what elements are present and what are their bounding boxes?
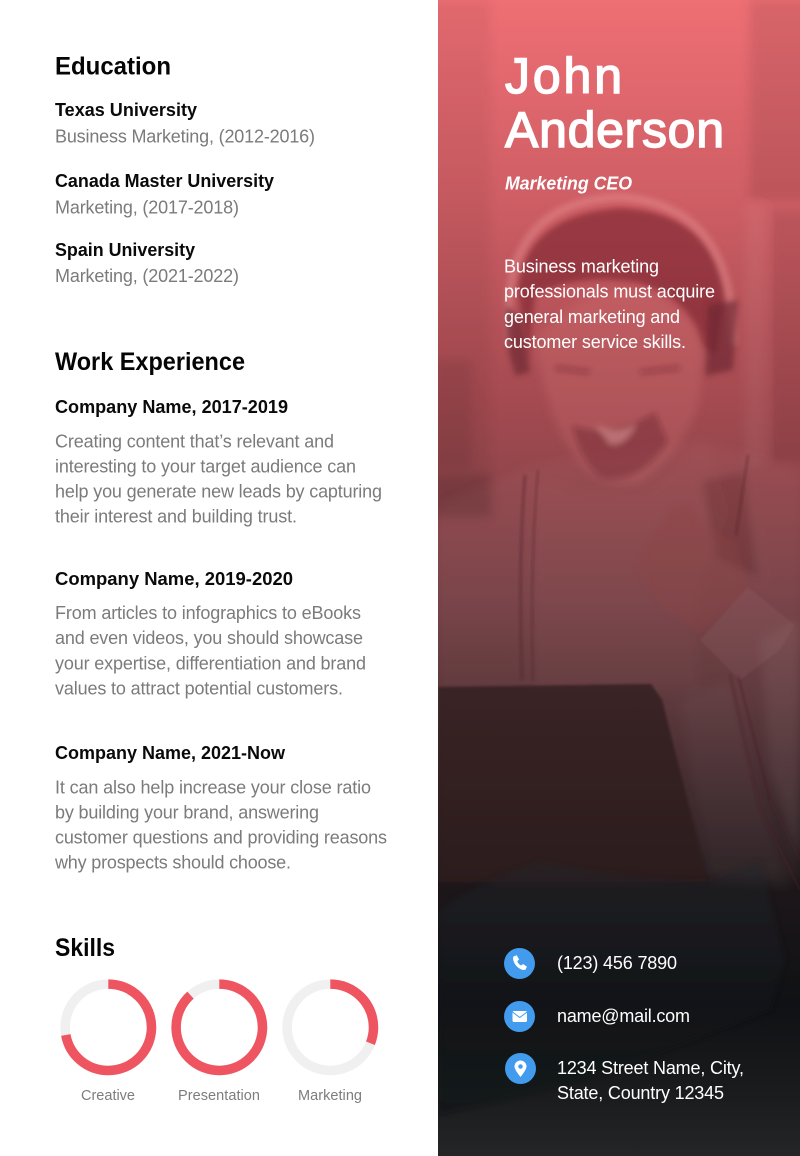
left white panel [0,0,438,1156]
job 2: your expertise, differentiation and brand [55,654,366,674]
jacket and torso [530,476,800,882]
contact: email: name@mail.com [557,1006,690,1026]
summary text: customer service skills. [504,332,686,352]
job 1: interesting to your target audience can [55,456,356,476]
entry: Texas University [55,100,315,146]
contact: address: 1234 Street Name, City, [557,1058,744,1078]
donut: presentation 88% [176,984,262,1070]
job title: Marketing CEO [505,174,632,194]
job 1: Company Name, 2017-2019 [55,397,288,417]
contact: address [505,1053,744,1103]
entry: Canada Master University: Canada Master University [55,171,274,191]
contact: phone: (123) 456 7890 [557,953,677,973]
panel: photo with red gradient overlay [432,0,800,1156]
summary text: general marketing and [504,307,680,327]
donut: creative 72% [65,984,152,1070]
icon: envelope [504,1001,535,1032]
job 1 [55,397,382,526]
job 3: Company Name, 2021-Now [55,743,286,763]
entry: Spain University: Marketing, (2021-2022) [55,266,239,286]
name: Anderson [505,102,724,158]
job 1: their interest and building trust. [55,506,297,526]
icon: phone [504,948,535,979]
background window stripes [432,0,800,520]
summary text: Business marketing [504,256,659,276]
name [505,48,724,158]
icon: map pin [505,1053,536,1084]
job 3 [54,743,387,872]
name: John [505,48,622,104]
job 2 [55,569,366,698]
skill labels: Presentation [178,1088,260,1104]
job 2: Company Name, 2019-2020 [55,569,293,589]
entry: Texas University: Texas University [55,100,197,120]
summary text: professionals must acquire [504,282,715,302]
sleeve cuff [703,590,760,678]
beard and mouth [555,368,680,479]
job 3: why prospects should choose. [54,852,291,872]
skill labels [81,1088,362,1104]
laptop [438,684,708,882]
heading: education: Education [55,52,171,80]
entry: Texas University: Business Marketing, (2012-2016) [55,126,315,146]
hair [518,208,725,360]
heading: skills: Skills [55,934,115,962]
job 2: values to attract potential customers. [55,678,343,698]
entry: Spain University: Spain University [55,240,195,260]
fist [692,616,712,630]
contact: phone [504,948,677,979]
summary text [504,256,715,352]
contact: email [504,1001,690,1032]
skill labels: Creative [81,1088,135,1104]
section: education [55,52,315,286]
job 3: by building your brand, answering [55,802,319,822]
heading: work experience: Work Experience [55,348,245,376]
headphones band [508,197,733,345]
job 1: Creating content that’s relevant and [55,432,334,452]
entry: Canada Master University: Marketing, (2017-2018) [55,198,239,218]
entry: Canada Master University [55,171,274,218]
section: skills [55,934,373,1104]
job 1: help you generate new leads by capturing [55,482,382,502]
jacket seams [521,455,800,890]
job 2: From articles to infographics to eBooks [55,603,361,623]
face [536,290,704,484]
contact: address: State, Country 12345 [557,1083,724,1103]
legs [442,867,755,1109]
donut: marketing 31% [287,984,373,1070]
entry: Spain University [55,240,239,286]
job 3: It can also help increase your close ratio [55,778,371,798]
skill labels: Marketing [298,1088,362,1104]
job 3: customer questions and providing reasons [55,828,387,848]
section: work experience [54,348,387,872]
job 2: and even videos, you should showcase [55,628,363,648]
ear cups [506,300,738,376]
